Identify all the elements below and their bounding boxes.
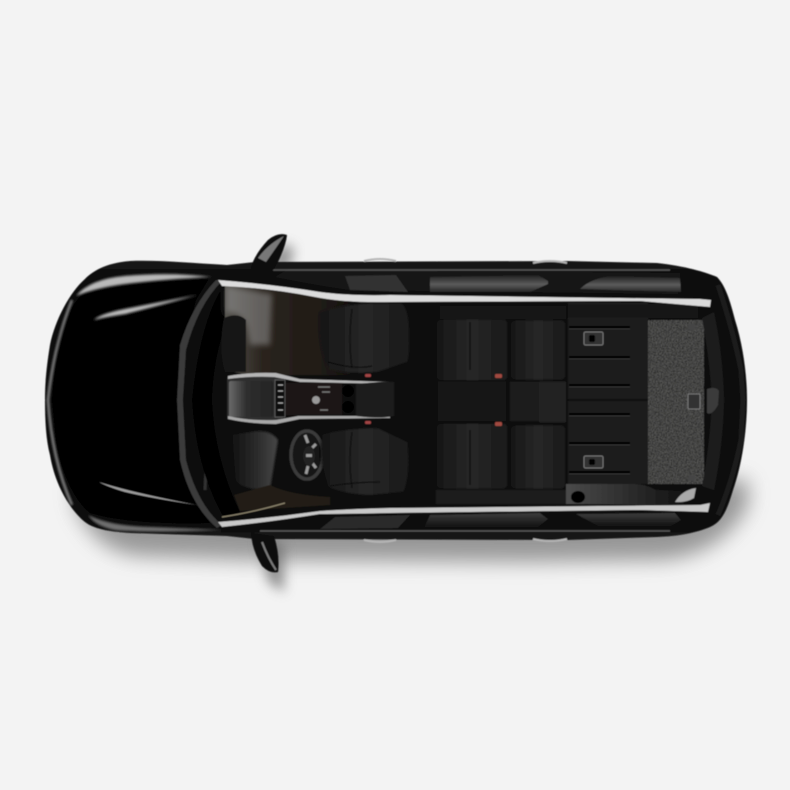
red buckle bottom <box>365 421 371 424</box>
windshield pillar <box>177 280 222 528</box>
headrest gap <box>440 306 566 319</box>
cup holder two <box>342 401 354 413</box>
front seats <box>320 303 410 495</box>
mirror bottom <box>251 533 278 572</box>
tailgate sill <box>702 312 724 490</box>
mirror shadow <box>258 244 294 592</box>
mirror top <box>251 234 287 272</box>
red buckle top <box>365 374 371 377</box>
armrest <box>356 382 394 418</box>
seam lines <box>436 320 566 490</box>
bottom rail <box>218 503 710 527</box>
latch top <box>584 332 603 345</box>
wiper <box>200 365 207 490</box>
rear seat top left <box>436 319 508 381</box>
mirror highlight <box>258 236 284 262</box>
rear seat top right <box>510 320 566 380</box>
front cabin <box>221 285 350 511</box>
vents and buttons <box>275 380 285 417</box>
hood highlight bottom <box>88 515 222 532</box>
gear panel <box>286 383 342 415</box>
top panel mid <box>345 275 408 292</box>
lower trim wood <box>234 485 330 511</box>
speaker hole <box>571 491 585 503</box>
hood crease bottom <box>99 482 197 505</box>
mirror bottom highlight <box>262 542 276 570</box>
red buckle lower <box>495 422 502 426</box>
tie-down top <box>688 324 695 330</box>
button stack <box>278 385 283 410</box>
top door panel rear <box>580 276 681 292</box>
door handles <box>364 259 567 542</box>
groove highlights <box>569 329 630 474</box>
glass <box>192 285 240 518</box>
screen housing <box>227 373 283 424</box>
cup holder one <box>342 385 354 397</box>
wheel arch trim <box>566 304 698 505</box>
cabin floor <box>205 291 727 512</box>
sill lines <box>260 270 670 531</box>
top rail <box>228 373 390 384</box>
floor grooves <box>569 327 630 472</box>
centre seat right <box>510 381 566 421</box>
third row folded seats <box>568 303 648 484</box>
wheel hub <box>303 446 315 466</box>
rear seat bottom left <box>436 423 508 489</box>
car body <box>45 261 747 540</box>
tailgate lock <box>707 388 719 414</box>
carpet <box>648 320 704 484</box>
centre seat left <box>438 381 506 421</box>
driver seat <box>321 428 409 495</box>
cargo floor <box>648 312 724 490</box>
bottom door panel rear <box>576 513 681 527</box>
pillar haze <box>226 286 272 345</box>
top rail <box>218 280 711 307</box>
nose highlight <box>48 300 72 505</box>
bottom panel mid <box>320 515 410 529</box>
passenger seat <box>320 303 410 373</box>
second row seats <box>436 306 568 504</box>
seat details <box>328 309 380 488</box>
rear seat bottom right <box>510 425 566 489</box>
hood highlight top <box>76 274 212 296</box>
roof rails <box>218 280 711 527</box>
wheel spokes <box>305 435 316 474</box>
car <box>45 234 747 572</box>
brown interior <box>225 285 350 375</box>
back strip <box>568 303 648 319</box>
bottom rail <box>228 416 390 424</box>
car drop shadow <box>75 480 748 562</box>
armrest fold <box>539 381 566 423</box>
windshield frame <box>177 280 240 528</box>
gear knob <box>312 396 320 404</box>
gear selector <box>312 387 330 410</box>
tie-down bottom <box>688 475 695 481</box>
side panels <box>260 259 681 542</box>
panel divider <box>568 399 648 401</box>
screen <box>229 381 273 417</box>
trim highlight <box>675 488 696 502</box>
trim tube <box>566 484 694 505</box>
wheel rim <box>291 431 323 479</box>
hood surface <box>52 277 210 523</box>
hood <box>48 274 222 532</box>
cup holders <box>342 385 354 413</box>
top side glass strip <box>275 268 680 294</box>
upper trim <box>568 304 698 318</box>
hood crease top <box>94 295 197 320</box>
bottom door panel front <box>424 513 548 528</box>
a-pillar reflect <box>222 503 285 517</box>
red buckle upper <box>495 374 502 378</box>
sill behind seats <box>436 490 568 504</box>
steering wheel <box>291 431 323 479</box>
dash left <box>221 315 246 372</box>
dash right driver side <box>232 431 278 490</box>
latch bottom <box>584 456 603 468</box>
rear glass corner <box>718 285 743 515</box>
top door panel front <box>430 275 548 292</box>
folded floor <box>568 303 648 484</box>
wheel badge <box>306 454 312 457</box>
cargo latch <box>688 394 700 409</box>
centre console <box>227 373 394 424</box>
